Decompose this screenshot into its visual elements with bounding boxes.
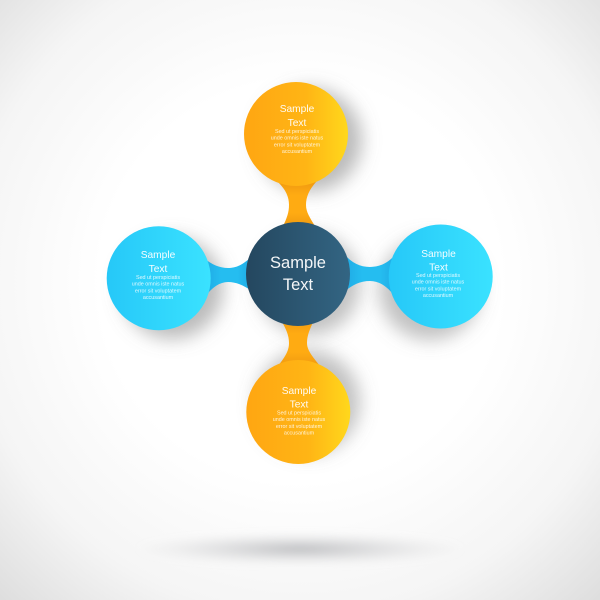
center node xyxy=(246,222,350,326)
connector: left xyxy=(204,256,252,298)
right node body: error sit voluptatem xyxy=(415,286,462,292)
left node body: Sed ut perspiciatis xyxy=(136,275,180,281)
right node heading: Text xyxy=(429,262,448,274)
shadow: left circle xyxy=(121,237,223,339)
center node label: Text xyxy=(283,276,314,294)
left node heading: Text xyxy=(149,264,168,275)
left node xyxy=(107,226,211,330)
right node heading: Sample xyxy=(421,249,456,260)
connector: bottom xyxy=(278,320,320,366)
shadow: bottom circle xyxy=(256,350,360,454)
top node body: Sed ut perspiciatis xyxy=(275,129,319,135)
bottom node body: unde omnis iste natus xyxy=(273,417,326,423)
right node body: unde omnis iste natus xyxy=(412,280,465,286)
top node heading: Sample xyxy=(280,104,315,115)
top node heading: Text xyxy=(288,118,307,129)
bottom node heading: Sample xyxy=(282,386,317,397)
bottom node body: accusantium xyxy=(284,430,315,436)
shadow: right circle xyxy=(379,238,481,340)
bottom node body: error sit voluptatem xyxy=(276,424,323,430)
bottom node heading: Text xyxy=(290,400,309,410)
right node xyxy=(389,224,493,328)
floor shadow xyxy=(135,533,465,565)
connector: top xyxy=(278,182,316,226)
top node body: accusantium xyxy=(282,149,313,155)
top node body: error sit voluptatem xyxy=(274,142,321,148)
top node xyxy=(244,82,348,186)
right node body: Sed ut perspiciatis xyxy=(416,273,460,279)
left node body: accusantium xyxy=(143,295,174,301)
bottom node xyxy=(246,360,350,464)
center node label: Sample xyxy=(270,254,326,272)
left node body: error sit voluptatem xyxy=(135,288,182,294)
shadow: center circle xyxy=(258,233,360,335)
right node body: accusantium xyxy=(423,293,454,299)
connector: right xyxy=(344,254,396,298)
left node body: unde omnis iste natus xyxy=(132,282,185,288)
bottom node body: Sed ut perspiciatis xyxy=(277,410,321,416)
shadow: top circle xyxy=(258,88,362,192)
top node body: unde omnis iste natus xyxy=(271,136,324,142)
left node heading: Sample xyxy=(141,250,176,261)
